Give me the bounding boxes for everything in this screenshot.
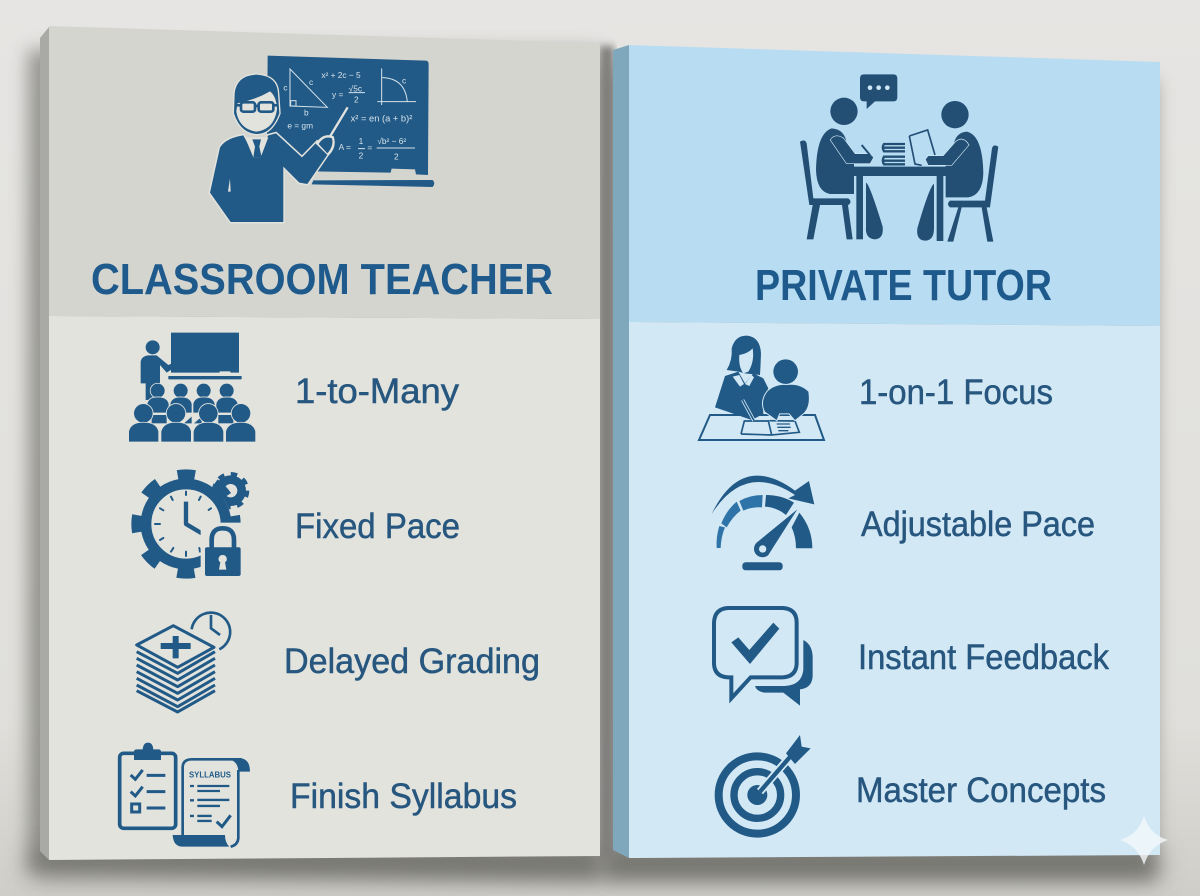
panel header band <box>629 45 1160 326</box>
icon: four-point sparkle <box>1120 816 1168 865</box>
icon: tutor and student at a table <box>800 74 998 242</box>
icon: teacher at chalkboard: c <box>402 75 406 85</box>
label: Finish Syllabus: Finish Syllabus <box>290 777 517 816</box>
label: Master Concepts: Master Concepts <box>856 771 1106 810</box>
icon: stack of papers with clock <box>137 613 230 712</box>
icon: checklist and syllabus: SYLLABUS <box>189 770 232 779</box>
icon: teacher at chalkboard: √5c <box>349 83 362 93</box>
panel body <box>629 322 1160 858</box>
label: 1-to-Many: 1-to-Many <box>295 372 460 411</box>
icon: teacher at chalkboard: 1 <box>359 136 364 146</box>
panel side edge <box>40 27 49 860</box>
icon: teacher at chalkboard: 2 <box>359 151 364 161</box>
icon: teacher at chalkboard: A = <box>339 142 351 152</box>
panel header band <box>49 26 600 319</box>
icon: teacher at chalkboard: y = <box>332 89 343 99</box>
icon: teacher at chalkboard: 2 <box>394 151 399 161</box>
icon: teacher at chalkboard: 2 <box>354 94 359 104</box>
panel side edge <box>613 45 629 858</box>
label: 1-on-1 Focus: 1-on-1 Focus <box>859 373 1053 412</box>
label: Fixed Pace: Fixed Pace <box>295 507 460 546</box>
icon: speedometer with arrow <box>712 476 814 570</box>
icon: checklist and syllabus <box>120 743 250 847</box>
icon: teacher at chalkboard: = <box>367 143 372 153</box>
panel body <box>49 316 600 860</box>
icon: teacher at chalkboard: b <box>304 107 309 117</box>
icon: teacher at chalkboard: √b² − 6² <box>377 136 406 146</box>
label: Adjustable Pace: Adjustable Pace <box>861 505 1095 544</box>
icon: teacher at chalkboard: c <box>283 83 287 93</box>
icon: speech bubble <box>860 74 897 109</box>
icon: teacher at chalkboard <box>210 56 434 222</box>
icon: teacher at chalkboard: c <box>309 77 313 87</box>
icon: tutor helping child <box>699 336 824 440</box>
icon: teacher at chalkboard: e = gm <box>287 121 313 131</box>
icon: teacher at chalkboard: x² = en (a + b)² <box>351 114 412 124</box>
icon: clock gear with lock <box>137 472 247 580</box>
label: Instant Feedback: Instant Feedback <box>858 638 1109 677</box>
heading: classroom teacher: CLASSROOM TEACHER <box>91 255 553 304</box>
panel: classroom teacher <box>40 26 600 860</box>
icon: class of students <box>129 333 255 442</box>
icon: feedback chat bubbles <box>714 608 813 706</box>
heading: private tutor: PRIVATE TUTOR <box>755 261 1052 310</box>
icon: target with arrow <box>719 735 811 834</box>
panel: private tutor <box>613 45 1160 858</box>
label: Delayed Grading: Delayed Grading <box>284 642 540 681</box>
icon: teacher at chalkboard: x² + 2c − 5 <box>321 70 361 80</box>
